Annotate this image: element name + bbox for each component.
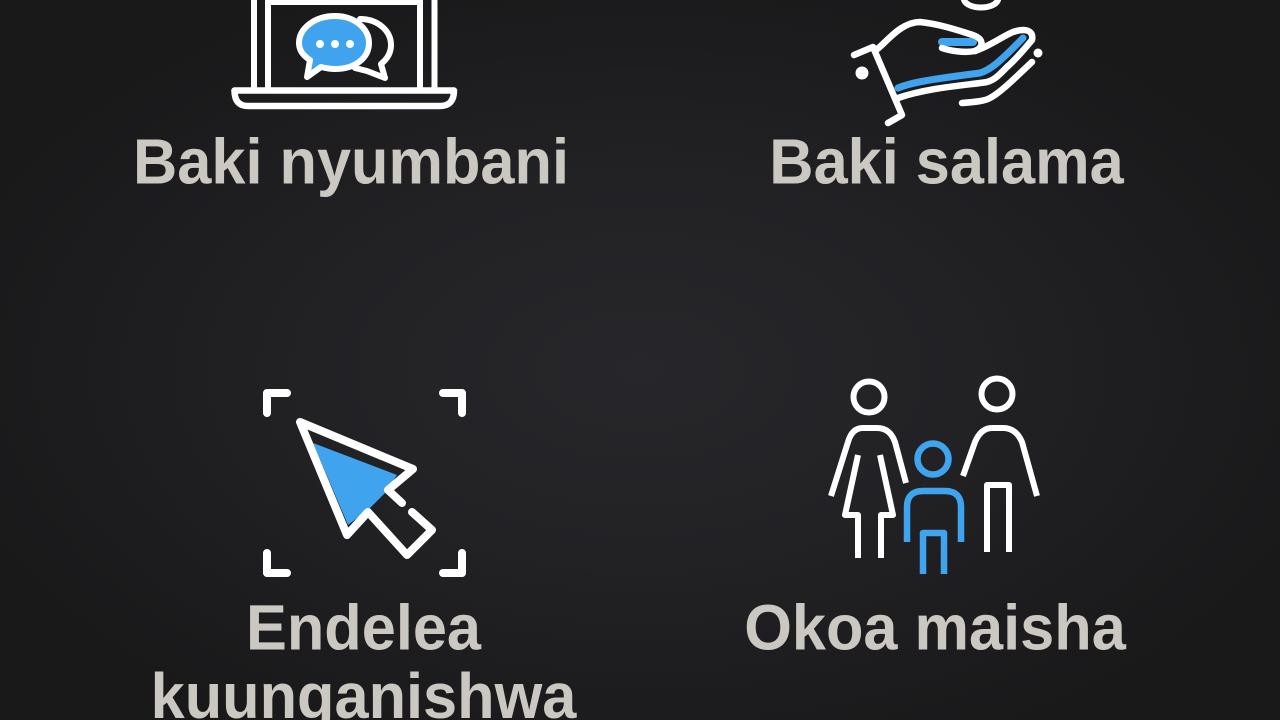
heading: Baki salama: Baki salama [769, 126, 1124, 198]
heading: Endelea kuunganishwa: Endelea [246, 592, 481, 664]
heading: Baki nyumbani: Baki nyumbani [133, 126, 569, 198]
heading: Okoa maisha: Okoa maisha [744, 592, 1126, 664]
heading: Endelea kuunganishwa [151, 592, 577, 720]
